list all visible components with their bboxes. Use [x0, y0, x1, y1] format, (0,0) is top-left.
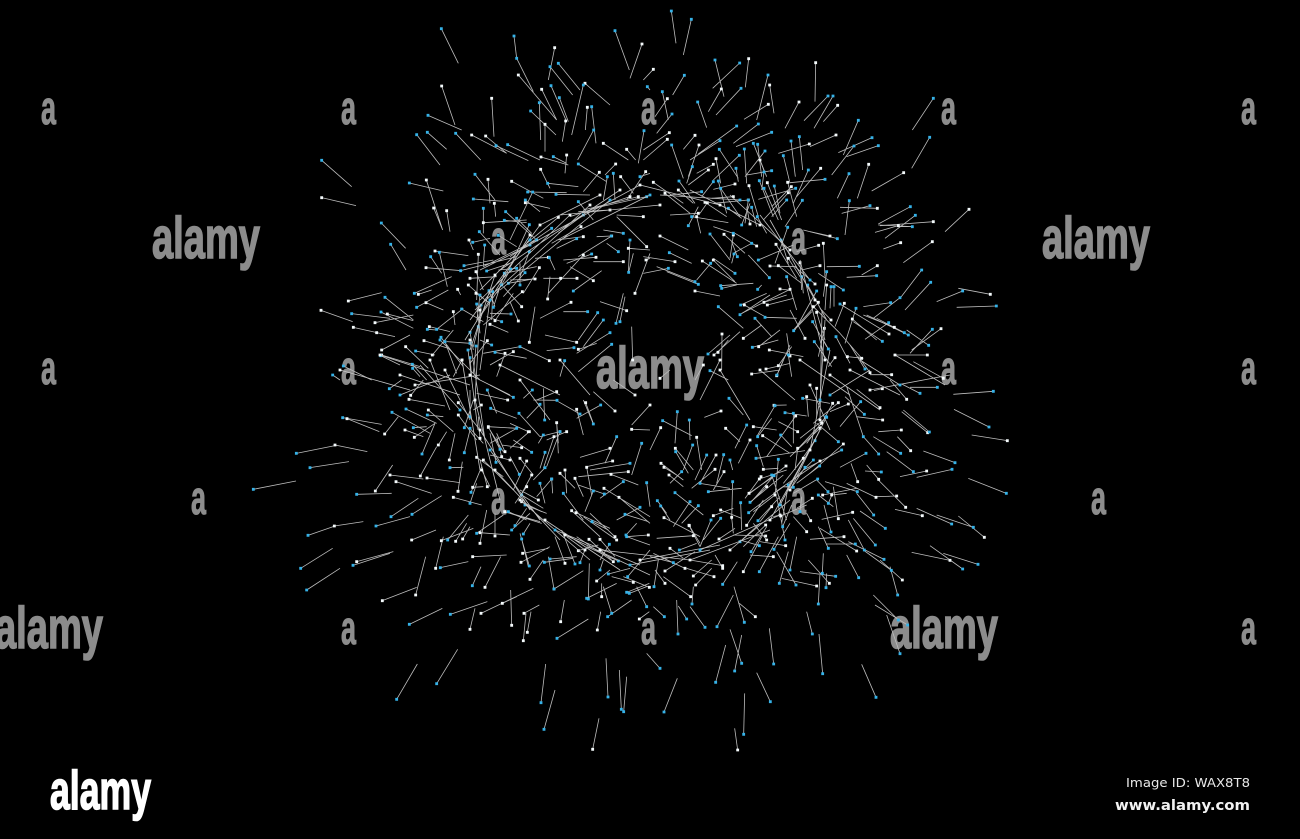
watermark: repeated small "a" marks: a	[341, 81, 356, 134]
watermark: repeated small "a" marks: a	[1091, 471, 1106, 524]
footer website: www.alamy.com	[1115, 798, 1250, 814]
watermark: large alamy logos: alamy	[890, 596, 998, 661]
watermark: repeated small "a" marks: a	[41, 341, 56, 394]
watermark: repeated small "a" marks: a	[791, 471, 806, 524]
watermark: repeated small "a" marks: a	[641, 601, 656, 654]
footer image id: Image ID: WAX8T8	[1126, 775, 1250, 790]
watermark: repeated small "a" marks: a	[1241, 81, 1256, 134]
particle burst: lower-right quadrant	[647, 380, 1007, 750]
watermark: repeated small "a" marks: a	[941, 341, 956, 394]
watermark: repeated small "a" marks: a	[191, 471, 206, 524]
particle burst: upper-left quadrant	[321, 29, 650, 380]
footer logo: alamy	[50, 759, 151, 821]
watermark: repeated small "a" marks: a	[341, 601, 356, 654]
watermark: repeated small "a" marks: a	[491, 211, 506, 264]
watermark: repeated small "a" marks: a	[1241, 341, 1256, 394]
watermark: repeated small "a" marks: a	[1241, 601, 1256, 654]
watermark: repeated small "a" marks: a	[641, 81, 656, 134]
watermark: large alamy logos	[0, 206, 1150, 661]
watermark: large alamy logos: alamy	[596, 336, 704, 401]
particle burst: lower-left quadrant	[253, 380, 650, 749]
watermark: repeated small "a" marks	[41, 81, 1256, 654]
particle burst: upper-right quadrant	[643, 11, 996, 380]
watermark: repeated small "a" marks: a	[491, 471, 506, 524]
watermark: repeated small "a" marks: a	[791, 211, 806, 264]
watermark: repeated small "a" marks: a	[41, 81, 56, 134]
particle burst: dense central ring	[340, 185, 950, 575]
watermark: large alamy logos: alamy	[1042, 206, 1150, 271]
watermark: large alamy logos: alamy	[152, 206, 260, 271]
watermark: repeated small "a" marks: a	[341, 341, 356, 394]
watermark: repeated small "a" marks: a	[941, 81, 956, 134]
